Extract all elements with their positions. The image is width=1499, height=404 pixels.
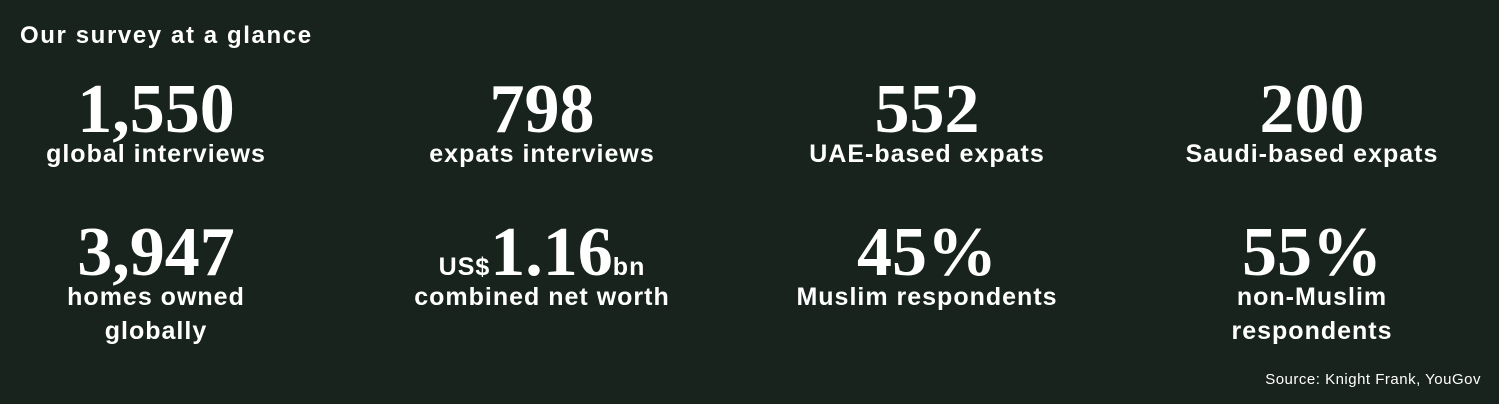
stat: global interviews: 1,550 (77, 71, 235, 148)
title: Our survey at a glance (20, 22, 313, 49)
stat: Muslim respondents: Muslim respondents (796, 283, 1058, 311)
stat: non-Muslim respondents (1231, 214, 1393, 345)
stat: non-Muslim respondents: 55% (1242, 214, 1382, 291)
stat: Saudi-based expats: 200 (1260, 71, 1364, 148)
stat: expats interviews: 798 (490, 71, 594, 148)
stat: homes owned: globally (105, 317, 207, 345)
stat: global interviews (46, 71, 266, 168)
stat: net worth (414, 214, 670, 311)
stat: UAE-based expats: UAE-based expats (809, 140, 1045, 168)
stat: net worth: US$1.16bn (439, 214, 645, 291)
stat: UAE-based expats (809, 71, 1045, 168)
stat: Saudi-based expats (1186, 71, 1438, 168)
stat: net worth: combined net worth (414, 283, 670, 311)
stat: homes owned: 3,947 (77, 214, 235, 291)
stat: homes owned (67, 214, 245, 345)
stat: expats interviews (429, 71, 655, 168)
stat: homes owned: homes owned (67, 283, 245, 311)
source: Source: Knight Frank, YouGov (1265, 371, 1481, 388)
stat: UAE-based expats: 552 (874, 71, 980, 148)
stat: Muslim respondents: 45% (857, 214, 997, 291)
stat: expats interviews: expats interviews (429, 140, 655, 168)
stat: Muslim respondents (796, 214, 1058, 311)
stat: non-Muslim respondents: respondents (1231, 317, 1393, 345)
stat: Saudi-based expats: Saudi-based expats (1186, 140, 1438, 168)
stat: non-Muslim respondents: non-Muslim (1237, 283, 1387, 311)
stat: global interviews: global interviews (46, 140, 266, 168)
